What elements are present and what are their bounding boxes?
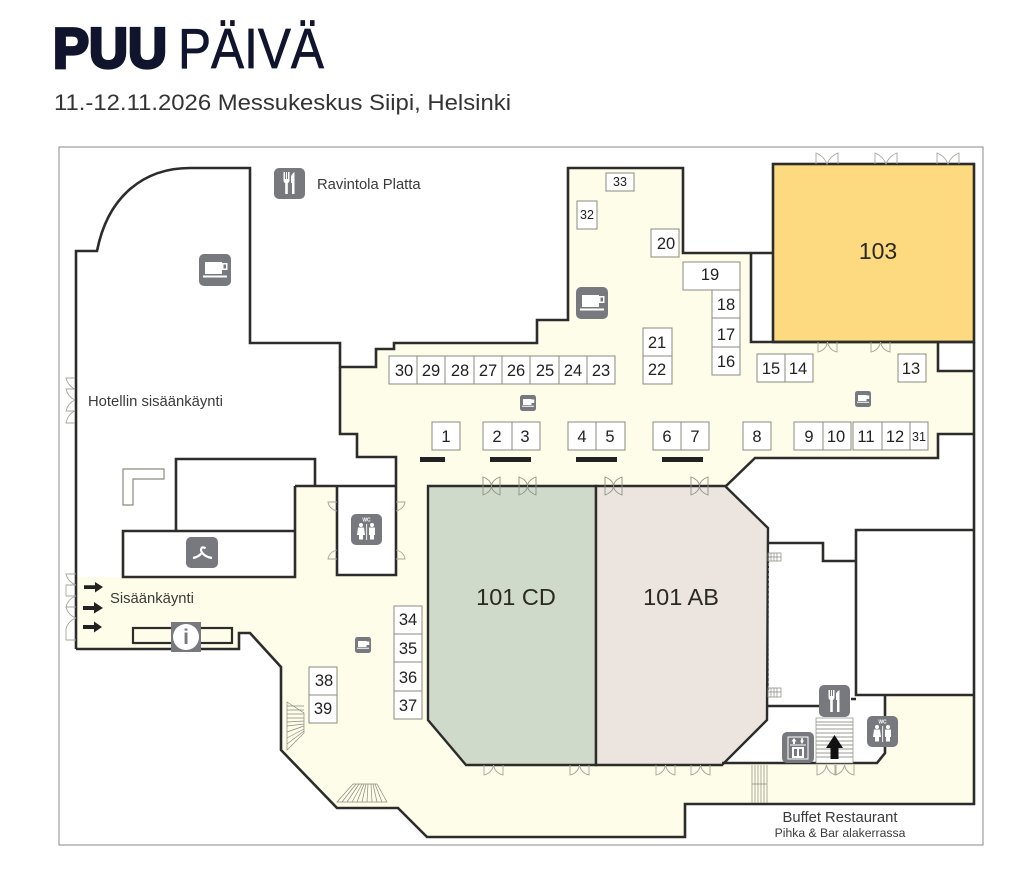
booths: 24 [564,362,582,380]
icon: WC left [351,514,382,545]
booths: 39 [314,700,332,718]
icon: WC right: WC [878,720,887,726]
booths: 33 [613,175,627,189]
icon: info: i [183,626,189,649]
booths: 15 [762,360,780,378]
booths: 1 [441,428,451,446]
icon: coffee 2 [576,287,608,319]
booths: 22 [648,361,666,379]
small stairs lower [768,688,781,697]
icon: buffet restaurant [819,685,850,717]
icon: WC right [867,716,898,747]
room 101 AB: 101 AB [643,584,719,610]
icon: coffee small right [855,391,871,407]
booths: 3 [520,428,530,446]
booths: 28 [451,362,469,380]
booths: 18 [717,296,735,314]
booths: 12 [886,428,904,446]
booths: 2 [492,428,502,446]
spiral stairs left [287,702,304,750]
title: logo [53,16,324,81]
spiral stairs bottom [337,784,387,802]
title: logo: PÄIVÄ [178,17,324,81]
booths: 19 [701,266,719,284]
booths: 37 [399,697,417,715]
booths: 34 [399,611,417,629]
small stairs upper [768,553,781,561]
booths: 38 [315,672,333,690]
booths: 5 [605,428,615,446]
icon: wardrobe hanger [186,537,218,568]
icon: WC left: WC [362,518,371,524]
booths: 35 [399,640,417,658]
map frame [59,147,983,845]
labels [88,177,421,607]
stairs bridge [752,765,767,803]
room 103: 103 [859,238,897,264]
booths: 17 [717,326,735,344]
icon: info [171,622,201,652]
icon: coffee small lower [355,637,371,653]
booths: 20 [657,235,675,253]
booths: 32 [580,208,594,222]
booths: 23 [592,362,610,380]
booths: 21 [648,334,666,352]
booths: 9 [804,428,814,446]
room 101 CD [428,486,596,765]
icon: restaurant Platta [274,168,305,199]
room 101 CD: 101 CD [476,584,556,610]
room 101 AB [596,486,768,765]
booths: 16 [717,353,735,371]
labels: Hotellin sisäänkäynti [88,394,223,410]
booths: 8 [752,428,762,446]
info desk [133,628,232,643]
labels: Ravintola Platta [317,177,421,193]
booths: 10 [827,428,845,446]
icon: lift [782,732,814,763]
buffet label [775,810,906,840]
booths: 13 [902,360,920,378]
booths: 27 [479,362,497,380]
booths [309,173,928,723]
booths: 4 [577,428,587,446]
booths: 31 [912,430,926,444]
title: logo: PUU [53,16,167,80]
booths: 7 [690,428,700,446]
buffet label: Pihka & Bar alakerrassa [775,826,906,840]
booths: 29 [422,362,440,380]
icon: coffee small top [520,395,536,411]
L-shaped counter [123,469,164,505]
subtitle: date and place: 11.-12.11.2026 Messukeskus Siipi, Helsinki [54,90,511,115]
icon: coffee 1 [199,254,231,286]
room 103 [773,164,974,342]
booths: 11 [857,428,875,446]
buffet label: Buffet Restaurant [783,810,897,826]
entrance arrows [83,582,103,632]
dashed partition [768,553,770,690]
labels: Sisäänkäynti [110,591,194,607]
stage bars [420,457,703,462]
floor: lower lobby [76,486,974,837]
booths: 6 [662,428,672,446]
walls [76,168,974,837]
booths: 14 [789,360,807,378]
booths: 36 [399,669,417,687]
booths: 30 [395,362,413,380]
floor: upper lobby [340,168,974,487]
doors [66,153,959,775]
booths: 26 [507,362,525,380]
booths: 25 [536,362,554,380]
main stairs with arrow [816,718,853,763]
